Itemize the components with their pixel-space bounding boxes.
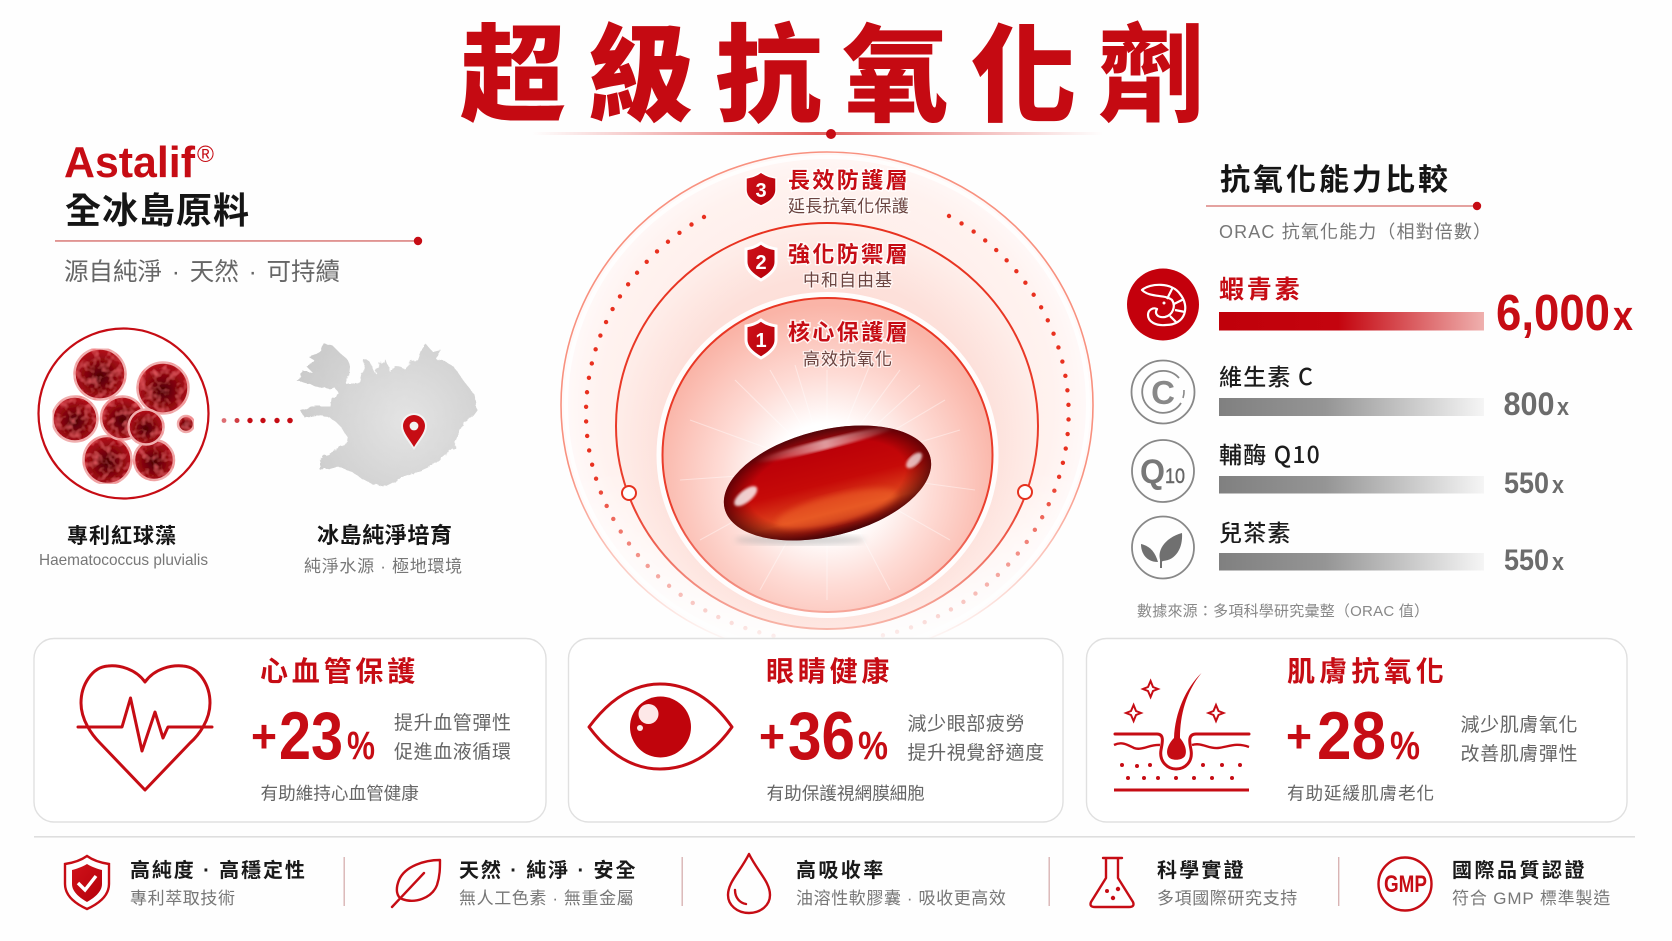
bar [1219, 476, 1484, 494]
item: natural [392, 858, 637, 908]
layer 1 title: 核心保護層 [788, 320, 910, 345]
layer 1 note: 高效抗氧化 [803, 350, 893, 369]
item: GMP [1378, 858, 1611, 910]
item text [1157, 858, 1298, 908]
panel: cardiovascular card [34, 638, 546, 822]
panel: three-layer protection rings [561, 152, 1093, 658]
card title: 肌膚抗氧化 [1287, 656, 1448, 687]
row: astaxanthin [1127, 268, 1634, 341]
benefits: 促進血液循環 [394, 741, 512, 763]
icon: Q10: 10 [1165, 465, 1185, 488]
footnote: 有助延緩肌膚老化 [1287, 784, 1435, 804]
icon: leaf [392, 860, 440, 907]
layer 3 note: 延長抗氧化保護 [788, 197, 909, 216]
stat: 23 [279, 698, 343, 774]
shield 3 [746, 172, 776, 206]
label: algae [39, 525, 208, 569]
footnote: 有助維持心血管健康 [260, 784, 419, 804]
icon: drop [728, 854, 770, 913]
item text: 高純度 · 高穩定性 [130, 858, 307, 882]
row: catechin [1132, 514, 1565, 578]
title: 超級抗氧化劑 [460, 18, 1226, 136]
subheading: 全冰島原料 [65, 190, 250, 231]
stat [1286, 698, 1420, 774]
panel: eye card [568, 638, 1063, 822]
middle ring [616, 223, 1038, 629]
bar [1219, 553, 1484, 570]
benefits: 提升血管彈性 [394, 712, 512, 734]
benefits: 減少眼部疲勞 [908, 713, 1025, 735]
shield 1: 1 [755, 330, 767, 352]
label: algae: Haematococcus pluvialis [39, 552, 208, 569]
stat [251, 698, 375, 774]
icon: GMP badge [1378, 858, 1432, 910]
benefits: 減少肌膚氧化 [1460, 714, 1578, 736]
comparison subtitle: ORAC 抗氧化能力（相對倍數） [1219, 222, 1491, 242]
benefits [1460, 714, 1578, 765]
shield 3: 3 [755, 180, 767, 202]
value: x [1613, 292, 1634, 339]
item text: 科學實證 [1157, 858, 1246, 882]
name: 兒茶素 [1219, 514, 1292, 548]
dotted orbit [586, 216, 1069, 638]
item text: 無人工色素 · 無重金屬 [459, 889, 634, 908]
item text: 高吸收率 [796, 858, 886, 882]
layer 2 title: 強化防禦層 [788, 242, 910, 267]
label: Iceland: 冰島純淨培育 [317, 523, 453, 548]
brand heading: ® [197, 141, 214, 167]
brand heading: Astalif [64, 138, 195, 187]
icon: heart with pulse [78, 666, 212, 790]
icon: GMP badge: GMP [1384, 871, 1427, 898]
layer 3 [746, 168, 910, 216]
icon: shield check [65, 856, 109, 909]
map: Iceland [296, 343, 477, 487]
item: purity [65, 856, 307, 909]
card title: 心血管保護 [260, 656, 419, 687]
benefits [908, 713, 1045, 764]
benefits [394, 712, 512, 763]
label: Iceland: 純淨水源 · 極地環境 [304, 557, 463, 576]
value: x [1557, 394, 1570, 421]
bar [1219, 398, 1484, 416]
value: x [1552, 549, 1565, 576]
name: 蝦青素 [1219, 276, 1302, 304]
card title: 眼睛健康 [766, 656, 893, 687]
icon: tea leaves [1132, 516, 1194, 578]
benefits: 改善肌膚彈性 [1460, 743, 1578, 765]
icon: Q10: Q [1140, 453, 1165, 491]
icon: vitamin C [1132, 360, 1194, 424]
item: science [1090, 858, 1298, 908]
benefits: 提升視覺舒適度 [908, 742, 1045, 764]
icon: map pin [401, 413, 427, 450]
label: algae: 專利紅球藻 [67, 525, 177, 548]
outer ring [561, 152, 1093, 658]
panel: ORAC comparison [1127, 164, 1634, 620]
shield 2: 2 [755, 252, 767, 274]
panel: skin card [1086, 638, 1627, 822]
name: 維生素 C [1219, 358, 1314, 392]
icon: eye [589, 684, 732, 769]
panel: quality strip [65, 854, 1611, 913]
icon: algae cells [38, 328, 208, 498]
value: 550 [1504, 467, 1549, 500]
shield 2 [746, 243, 776, 280]
value: 800 [1504, 386, 1554, 422]
title underline [532, 129, 1103, 139]
icon: flask [1090, 858, 1134, 907]
item text: 天然 · 純淨 · 安全 [459, 858, 637, 882]
stat: 28 [1317, 698, 1386, 774]
dotted connector [222, 418, 293, 423]
stat: % [347, 724, 375, 768]
layer 2 note: 中和自由基 [803, 271, 893, 290]
row: coenzyme Q10 [1132, 436, 1565, 502]
item text: 專利萃取技術 [130, 889, 236, 908]
source note: 數據來源：多項科學研究彙整（ORAC 值） [1137, 602, 1429, 620]
layer 3 title: 長效防護層 [788, 168, 910, 193]
capsule [712, 406, 943, 560]
footnote: 有助保護視網膜細胞 [766, 784, 925, 804]
stat: + [759, 710, 785, 762]
item text [130, 858, 307, 908]
stat: % [858, 724, 888, 768]
icon: shrimp [1127, 268, 1199, 340]
item text [459, 858, 637, 908]
heading rule [1206, 202, 1481, 210]
stat: 36 [788, 698, 855, 774]
item text: 符合 GMP 標準製造 [1452, 889, 1611, 908]
item text: 油溶性軟膠囊 · 吸收更高效 [796, 889, 1007, 908]
item text [1452, 858, 1611, 908]
stat: + [251, 710, 277, 762]
row: vitamin C [1132, 358, 1570, 424]
stat: % [1390, 724, 1420, 768]
icon: Q10 [1132, 440, 1194, 502]
name: 輔酶 Q10 [1219, 436, 1321, 470]
value: 6,000 [1496, 284, 1610, 341]
layer 2 [746, 242, 910, 290]
heading rule [55, 237, 422, 245]
ring markers [622, 485, 1032, 500]
icon: skin and hair follicle [1114, 673, 1249, 792]
stat: + [1286, 710, 1312, 762]
item text: 多項國際研究支持 [1157, 889, 1298, 908]
item text: 國際品質認證 [1452, 858, 1587, 882]
value: 550 [1504, 544, 1549, 577]
layer 1 [746, 320, 910, 369]
stat [759, 698, 888, 774]
comparison heading: 抗氧化能力比較 [1220, 164, 1451, 197]
item text [796, 858, 1007, 908]
tagline: 源自純淨 · 天然 · 可持續 [64, 258, 340, 286]
panel: Astalif origin [38, 138, 477, 576]
label: Iceland [304, 523, 463, 576]
icon: vitamin C: C [1151, 374, 1175, 411]
inner ring [656, 292, 998, 618]
value: x [1552, 472, 1565, 499]
shield 1 [746, 320, 776, 358]
item: absorption [728, 854, 1007, 913]
bar [1219, 312, 1484, 330]
